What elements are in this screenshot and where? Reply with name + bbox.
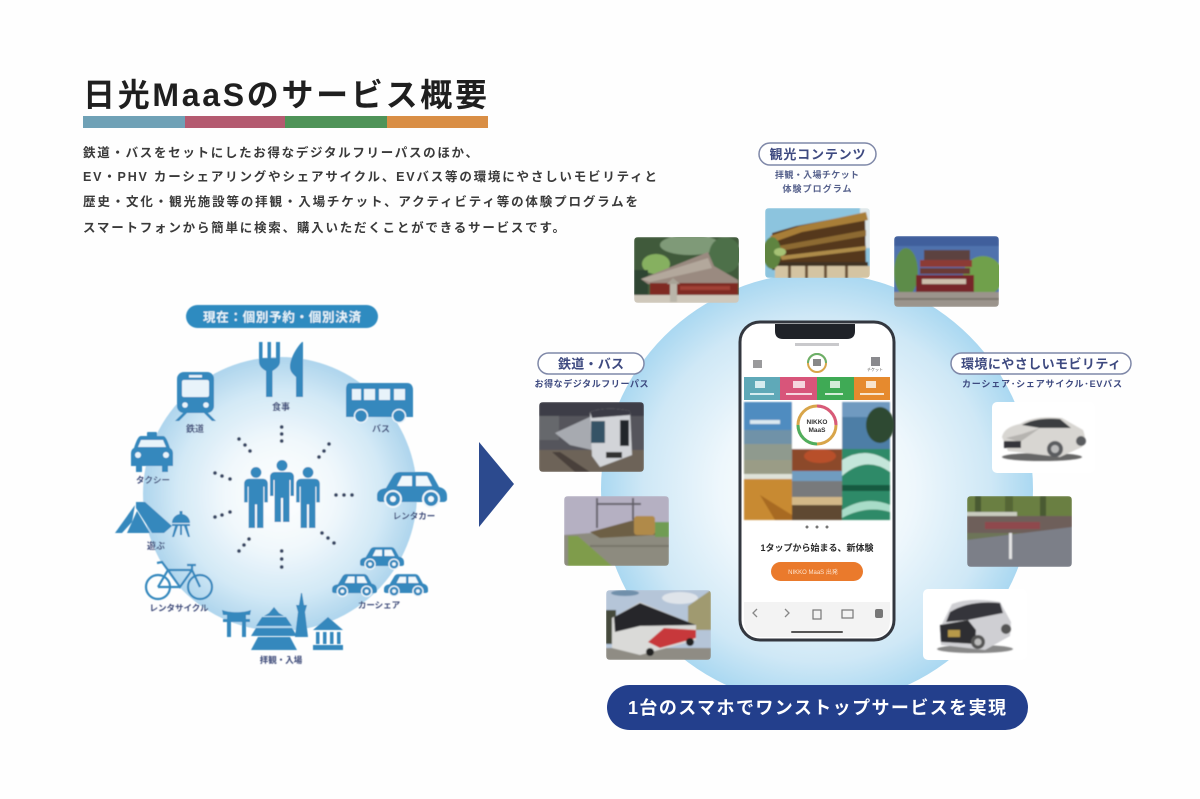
heading: tourism content: 観光コンテンツ (770, 147, 866, 162)
colour bar (83, 116, 488, 128)
photo: white electric car (992, 402, 1095, 473)
heading: eco mobility (951, 353, 1131, 389)
label: rental car: レンタカー (393, 511, 435, 521)
label: bus: バス (372, 424, 390, 434)
description text (83, 145, 657, 235)
bottom banner (607, 685, 1028, 730)
icon: three people (244, 460, 320, 528)
left pill heading: 現在：個別予約・個別決済 (203, 310, 361, 324)
phone button: NIKKO MaaS 出発 (788, 568, 838, 576)
label: rail: 鉄道 (186, 423, 204, 434)
heading: rail and bus: お得なデジタルフリーパス (534, 378, 648, 389)
phone photo mosaic (744, 402, 894, 520)
photo: limited express train (539, 402, 644, 472)
label: visits and admission: 拝観・入場 (260, 655, 303, 665)
photo: red gate right (894, 236, 1003, 307)
description text: 歴史・文化・観光施設等の拝観・入場チケット、アクティビティ等の体験プログラムを (83, 194, 638, 209)
panel: one-stop smartphone service (534, 143, 1131, 730)
left pill heading (186, 305, 378, 328)
phone header (753, 343, 883, 372)
icon: train (175, 372, 216, 421)
description text: EV・PHV カーシェアリングやシェアサイクル、EVバス等の環境にやさしいモビリティと (83, 169, 657, 184)
description text: 鉄道・バスをセットにしたお得なデジタルフリーパスのほか、 (83, 145, 478, 160)
left circle (143, 357, 417, 631)
phone button (771, 562, 863, 581)
icon: tent and grill (115, 502, 190, 537)
arrow (479, 442, 514, 527)
description text: スマートフォンから簡単に検索、購入いただくことができるサービスです。 (83, 220, 565, 235)
notch (775, 324, 855, 339)
icon: three share cars (332, 547, 428, 597)
photo: Yomeimon gate (763, 208, 870, 278)
phone header: チケット (867, 366, 883, 372)
carousel dots (806, 526, 828, 528)
label: food: 食事 (272, 401, 290, 412)
label: car share: カーシェア (358, 600, 401, 610)
phone tagline: 1タップから始まる、新体験 (760, 542, 874, 553)
header block (83, 77, 657, 235)
radiating dots (213, 425, 354, 569)
heading: eco mobility: カーシェア･シェアサイクル･EVバス (962, 379, 1122, 389)
icon: rental car (377, 472, 447, 508)
photo: train in countryside (564, 496, 669, 566)
heading: tourism content: 体験プログラム (782, 183, 852, 194)
phone logo: NIKKO (807, 419, 827, 426)
photo: shrine left (634, 235, 741, 303)
photo: compact electric car (923, 589, 1027, 660)
phone browser bar (744, 602, 890, 637)
phone menu tiles (744, 377, 890, 400)
icon: sightseeing buildings (222, 593, 343, 650)
heading: tourism content (759, 143, 876, 194)
bottom banner: 1台のスマホでワンストップサービスを実現 (628, 697, 1006, 718)
phone mockup (740, 322, 894, 640)
heading: eco mobility: 環境にやさしいモビリティ (961, 356, 1121, 372)
heading: rail and bus (534, 353, 648, 389)
label: taxi: タクシー (136, 475, 170, 485)
phone logo (798, 406, 836, 444)
panel: current individual booking (115, 305, 447, 665)
icon: bicycle (146, 562, 212, 599)
icon: bus (346, 383, 413, 422)
icon: fork and knife (259, 342, 303, 397)
label: play: 遊ぶ (147, 540, 165, 551)
icon: taxi (131, 432, 173, 472)
phone logo: MaaS (809, 427, 826, 434)
photo: share cycle port (967, 496, 1072, 567)
heading: rail and bus: 鉄道・バス (558, 356, 624, 372)
heading: tourism content: 拝観・入場チケット (775, 169, 859, 180)
right circle (601, 273, 1033, 705)
label: rental cycle: レンタサイクル (149, 603, 209, 613)
phone body (740, 322, 894, 640)
photo: coach bus (606, 590, 711, 660)
title: 日光MaaSのサービス概要 (83, 77, 487, 113)
